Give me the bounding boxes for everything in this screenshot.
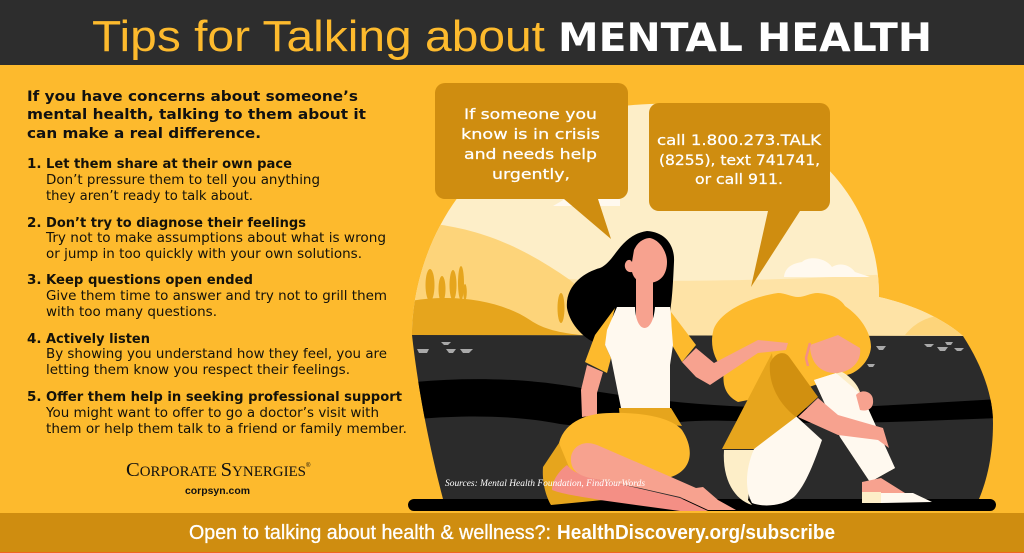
tip 1 [27,156,320,204]
seated woman with dark hair [543,231,788,511]
speech bubble right [649,103,830,287]
logo: Corporate Synergies: ® [306,462,311,469]
footer banner [0,513,1024,553]
tip 4: 4. [27,331,42,347]
speech bubble right: call 1.800.273.TALK [657,133,822,149]
intro heading: can make a real difference. [27,126,261,142]
intro heading [27,89,366,142]
logo: Corporate Synergies [126,459,311,497]
tip 1: Let them share at their own pace [46,156,292,172]
cloud [784,258,870,277]
tip 4: By showing you understand how they feel, you are [46,346,387,362]
tip 1: 1. [27,156,42,172]
tip 2: or jump in too quickly with your own solutions. [46,246,362,262]
speech bubble left [435,83,628,239]
speech bubble right: or call 911. [695,172,783,188]
tip 1: they aren’t ready to talk about. [46,188,253,204]
tip 5: them or help them talk to a friend or family member. [46,421,407,437]
intro heading: If you have concerns about someone’s [27,89,358,105]
tip 3: Give them time to answer and try not to grill them [46,288,387,304]
tip 4: Actively listen [46,331,150,347]
logo: Corporate Synergies: corpsyn.com [185,485,250,497]
tip 3: 3. [27,272,42,288]
tip 2: Don’t try to diagnose their feelings [46,215,306,231]
intro heading: mental health, talking to them about it [27,107,366,123]
speech bubble left: urgently, [492,167,570,183]
footer banner: Open to talking about health & wellness?: [189,522,551,544]
logo: Corporate Synergies: CORPORATE SYNERGIES [126,459,306,481]
tip 4: letting them know you respect their feelings. [46,362,350,378]
speech bubble left: and needs help [464,147,597,163]
sources note: Sources: Mental Health Foundation, FindYourWords [445,478,646,488]
tip 5: Offer them help in seeking professional support [46,389,403,405]
tip 2: 2. [27,215,42,231]
tip 5: 5. [27,389,42,405]
tip 4 [27,331,387,378]
water [400,330,1000,505]
tip 1: Don’t pressure them to tell you anything [46,172,320,188]
tip 3 [27,272,387,320]
tip 5: You might want to offer to go a doctor’s visit with [45,405,379,421]
tip 2 [27,215,386,262]
footer banner: HealthDiscovery.org/subscribe [557,522,835,544]
speech bubble right: (8255), text 741741, [659,153,820,169]
title banner [0,0,1024,65]
tip 5 [27,389,407,437]
tip 3: with too many questions. [46,304,217,320]
title banner: Tips for Talking about [92,12,545,61]
tip 3: Keep questions open ended [46,272,253,288]
crouching woman with blonde hair [712,293,932,505]
speech bubble left: If someone you [464,107,597,123]
cloud behind bubble [553,199,620,206]
title banner: MENTAL HEALTH [558,16,932,61]
speech bubble left: know is in crisis [461,127,600,143]
trees [426,266,564,323]
tip 2: Try not to make assumptions about what is wrong [45,230,386,246]
ground bar [408,499,996,511]
illustration: landscape [400,104,990,340]
